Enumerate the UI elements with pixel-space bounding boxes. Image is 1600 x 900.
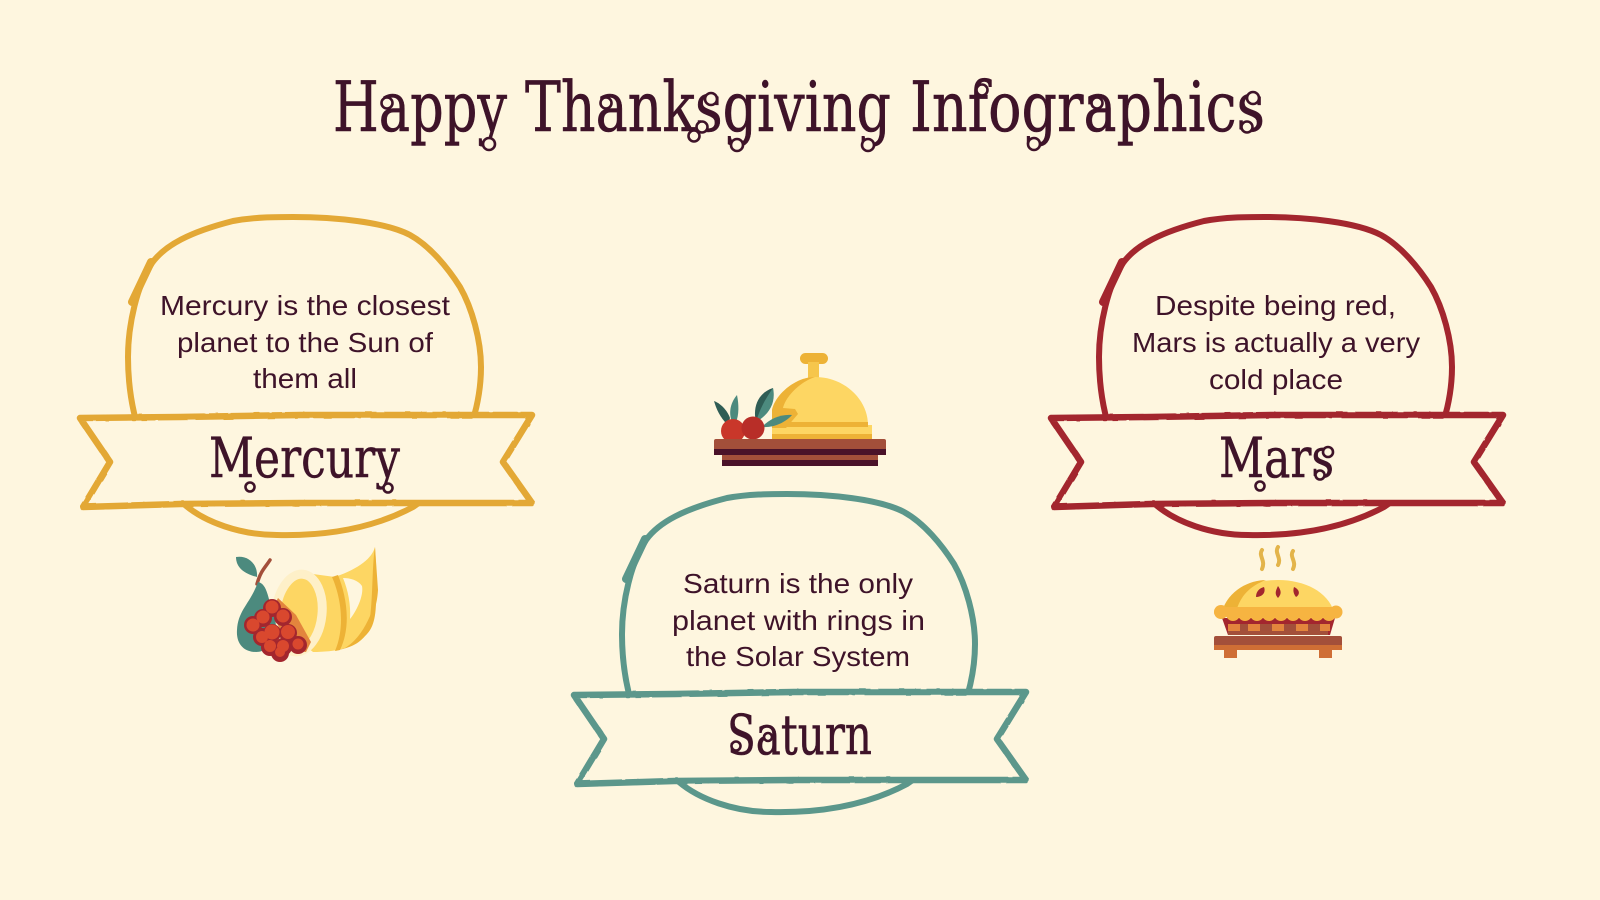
panel: Mercury (80, 217, 532, 535)
title: Infographics (910, 68, 1265, 148)
ribbon: Mars (1051, 415, 1503, 507)
text: Mercury description: Mercury is the closest (160, 290, 450, 321)
icon: cornucopia with pear and grapes (236, 547, 378, 662)
icon: cloche with apples (714, 353, 886, 466)
ribbon: Saturn (574, 692, 1026, 784)
ring: Mercury (128, 217, 481, 535)
text: Saturn description: the Solar System (686, 641, 910, 672)
title: Thanksgiving (525, 68, 891, 148)
label: Mercury: Mercury (209, 426, 400, 490)
text: Saturn description (672, 568, 925, 672)
ring: Mars (1099, 217, 1452, 535)
ribbon: Mercury (80, 415, 532, 507)
text: Mars description (1132, 290, 1420, 395)
label: Mars: Mars (1219, 426, 1334, 490)
text: Mercury description: planet to the Sun of (177, 327, 433, 358)
text: Mars description: cold place (1209, 364, 1343, 395)
text: Mercury description: them all (253, 363, 357, 394)
text: Mars description: Mars is actually a very (1132, 327, 1420, 358)
title: Happy (333, 68, 507, 148)
text: Mars description: Despite being red, (1155, 290, 1396, 321)
text: Saturn description: planet with rings in (672, 605, 925, 636)
title (333, 68, 1265, 151)
icon: steaming pie (1214, 547, 1342, 658)
label: Saturn: Saturn (727, 703, 872, 767)
ring: Saturn (622, 494, 975, 812)
text: Mercury description (160, 290, 450, 394)
panel: Mars (1051, 217, 1503, 535)
panel: Saturn (574, 494, 1026, 812)
text: Saturn description: Saturn is the only (683, 568, 913, 599)
